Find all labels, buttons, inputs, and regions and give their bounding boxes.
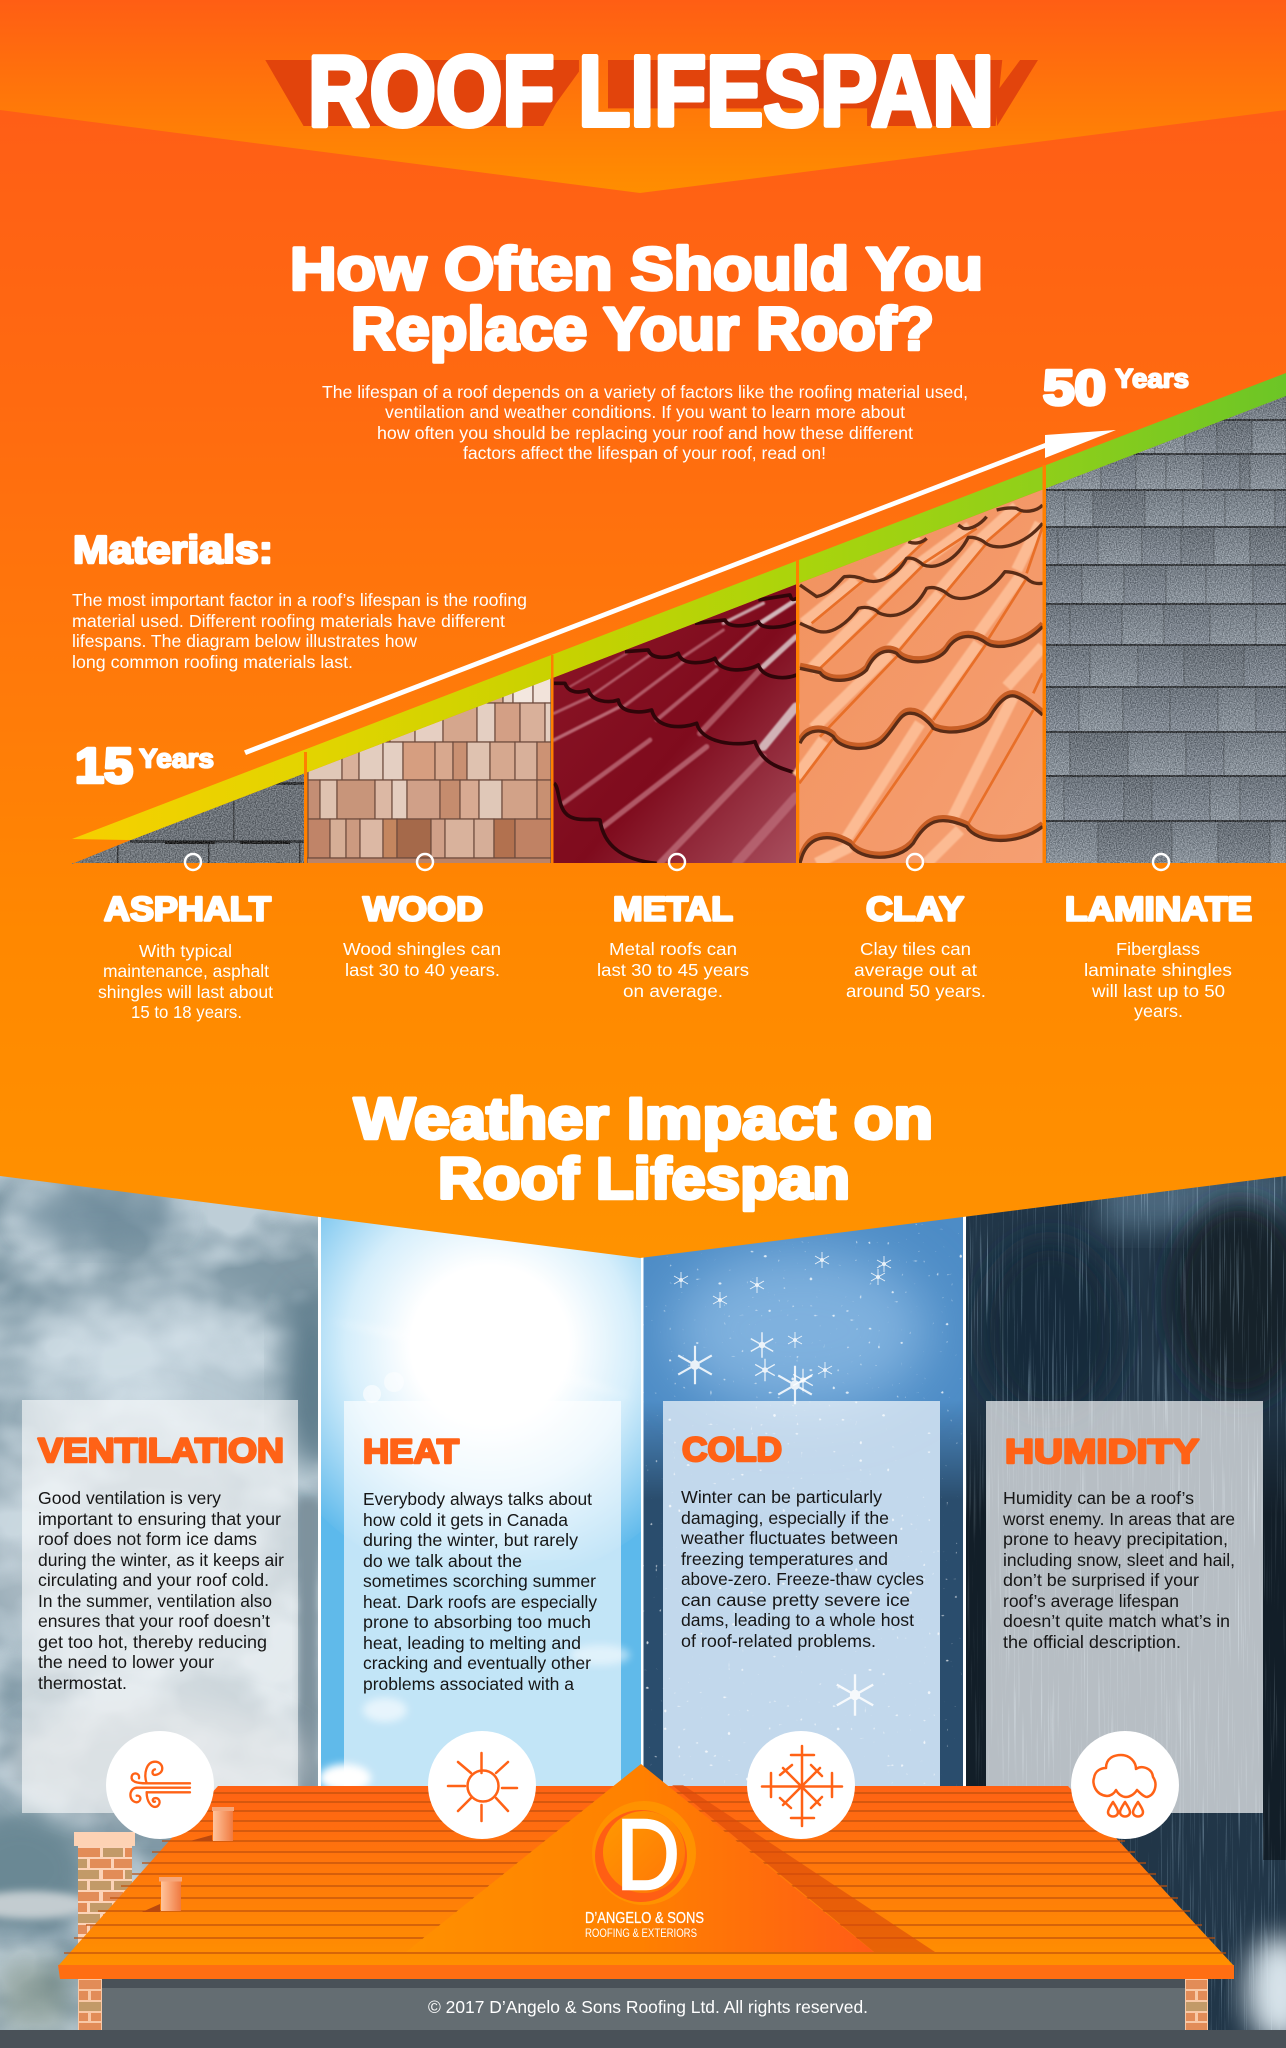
gable with logo bbox=[406, 1764, 874, 1952]
card: cold: Winter can be particularly bbox=[681, 1487, 882, 1507]
card: humidity bbox=[986, 1401, 1263, 1813]
separators between materials bbox=[304, 465, 1046, 863]
intro paragraph bbox=[322, 382, 968, 463]
label: 15 years: 15 bbox=[75, 740, 133, 794]
card: heat bbox=[344, 1401, 621, 1813]
heading: weather impact: Roof Lifespan bbox=[438, 1146, 850, 1212]
main orange section bbox=[0, 110, 1286, 1258]
card: ventilation: the need to lower your bbox=[38, 1652, 214, 1672]
roof vent pipe upper bbox=[190, 1807, 234, 1841]
chimney bbox=[74, 1832, 135, 1946]
logo mark bbox=[592, 1799, 696, 1911]
card: ventilation bbox=[22, 1400, 298, 1813]
heading: weather impact bbox=[354, 1086, 933, 1212]
material: laminate: years. bbox=[1134, 1001, 1183, 1021]
card: cold: freezing temperatures and bbox=[681, 1549, 888, 1569]
card: heat: heat. Dark roofs are especially bbox=[363, 1592, 597, 1612]
intro paragraph: factors affect the lifespan of your roof, read on! bbox=[463, 443, 826, 463]
card: cold: dams, leading to a whole host bbox=[681, 1610, 914, 1630]
logo wordmark bbox=[585, 1910, 704, 1940]
roof fascia bbox=[58, 1965, 1234, 1979]
card: heat: how cold it gets in Canada bbox=[363, 1510, 568, 1530]
card: humidity: don’t be surprised if your bbox=[1003, 1570, 1199, 1590]
roof bbox=[58, 1786, 1234, 1979]
card: ventilation: ensures that your roof doesn’t bbox=[38, 1611, 270, 1631]
material: wood: last 30 to 40 years. bbox=[345, 960, 500, 980]
card: heat: heat, leading to melting and bbox=[363, 1633, 581, 1653]
intro paragraph: how often you should be replacing your roof and how these different bbox=[377, 423, 913, 443]
icon: wind bbox=[106, 1731, 214, 1839]
wall soffit bbox=[102, 1979, 1185, 1988]
card: heat: cracking and eventually other bbox=[363, 1653, 591, 1673]
heading: materials: Materials: bbox=[73, 529, 273, 572]
photo: metal bbox=[553, 580, 797, 867]
material: laminate: laminate shingles bbox=[1084, 960, 1232, 980]
heading: how often: Replace Your Roof? bbox=[351, 296, 934, 362]
card: cold: above-zero. Freeze-thaw cycles bbox=[681, 1569, 924, 1589]
weather backgrounds bbox=[0, 1105, 1286, 2048]
arrow: 15 to 50 years bbox=[244, 430, 1116, 755]
timeline markers bbox=[185, 854, 1169, 870]
intro paragraph: The lifespan of a roof depends on a variety of factors like the roofing material used, bbox=[322, 382, 968, 402]
intro paragraph: ventilation and weather conditions. If you want to learn more about bbox=[385, 402, 905, 422]
card: ventilation: get too hot, thereby reducing bbox=[38, 1632, 267, 1652]
heading: weather impact: Weather Impact on bbox=[354, 1086, 933, 1152]
icon: sun bbox=[428, 1731, 536, 1839]
material: metal: METAL bbox=[613, 890, 733, 928]
card: ventilation: during the winter, as it keeps air bbox=[38, 1550, 284, 1570]
material: asphalt: maintenance, asphalt bbox=[103, 961, 269, 981]
materials paragraph: lifespans. The diagram below illustrates how bbox=[72, 631, 417, 651]
material: metal: on average. bbox=[623, 981, 723, 1001]
card: heat: do we talk about the bbox=[363, 1551, 522, 1571]
logo wordmark: D’ANGELO & SONS bbox=[585, 1910, 704, 1927]
texture grain bbox=[72, 774, 304, 864]
card: cold: of roof-related problems. bbox=[681, 1631, 876, 1651]
wall bbox=[102, 1979, 1185, 2030]
card: humidity: HUMIDITY bbox=[1005, 1433, 1199, 1471]
logo mark: D bbox=[616, 1799, 680, 1911]
card: cold bbox=[663, 1401, 940, 1813]
card: humidity: including snow, sleet and hail, bbox=[1003, 1550, 1235, 1570]
label: 15 years bbox=[75, 740, 214, 794]
card: heat: Everybody always talks about bbox=[363, 1489, 592, 1509]
icon: rain cloud bbox=[1071, 1731, 1179, 1839]
card: humidity: the official description. bbox=[1003, 1632, 1181, 1652]
material: asphalt bbox=[98, 890, 273, 1022]
material: wood bbox=[343, 890, 501, 980]
material: laminate bbox=[1065, 890, 1252, 1021]
card: ventilation: thermostat. bbox=[38, 1673, 127, 1693]
card: ventilation: circulating and your roof cold. bbox=[38, 1570, 269, 1590]
materials paragraph: material used. Different roofing materials have different bbox=[72, 611, 505, 631]
card: humidity: Humidity can be a roof’s bbox=[1003, 1488, 1194, 1508]
photo: laminate bbox=[1046, 380, 1286, 864]
label: 50 years bbox=[1043, 362, 1189, 416]
panel background: snow bbox=[644, 1217, 963, 1786]
ground strip bbox=[0, 2030, 1286, 2048]
material: laminate: will last up to 50 bbox=[1091, 981, 1225, 1001]
card: heat: problems associated with a bbox=[363, 1674, 574, 1694]
material: asphalt: With typical bbox=[139, 941, 232, 961]
column dividers bbox=[318, 1150, 966, 1790]
materials paragraph bbox=[72, 590, 527, 672]
material: metal bbox=[597, 890, 749, 1001]
card: cold: can cause pretty severe ice bbox=[681, 1590, 910, 1610]
card: heat: sometimes scorching summer bbox=[363, 1571, 596, 1591]
photo: asphalt bbox=[72, 774, 304, 864]
card: ventilation: Good ventilation is very bbox=[38, 1488, 221, 1508]
material: clay: around 50 years. bbox=[846, 981, 986, 1001]
panel background: rain bbox=[966, 1150, 1286, 2048]
material: laminate: LAMINATE bbox=[1065, 890, 1252, 928]
photo: wood bbox=[307, 660, 551, 864]
ascending colour band bbox=[72, 373, 1286, 840]
material: asphalt: shingles will last about bbox=[98, 982, 273, 1002]
card: ventilation: roof does not form ice dams bbox=[38, 1529, 257, 1549]
card: heat: HEAT bbox=[363, 1433, 459, 1471]
panel background: clouds bbox=[0, 1176, 318, 2030]
copyright: © 2017 D’Angelo & Sons Roofing Ltd. All rights reserved. bbox=[428, 1997, 868, 2017]
gable shadow bbox=[672, 1785, 935, 1952]
heading: how often bbox=[290, 236, 983, 362]
material: laminate: Fiberglass bbox=[1116, 939, 1200, 959]
card: ventilation: VENTILATION bbox=[38, 1432, 284, 1470]
material: clay bbox=[846, 890, 986, 1001]
material: asphalt: 15 to 18 years. bbox=[131, 1002, 242, 1022]
heading: how often: How Often Should You bbox=[290, 236, 983, 302]
roof vent pipe lower bbox=[142, 1877, 182, 1912]
card: cold: COLD bbox=[682, 1431, 782, 1469]
material: wood: WOOD bbox=[363, 890, 483, 928]
brick columns bbox=[78, 1979, 1208, 2030]
card: cold: weather fluctuates between bbox=[680, 1528, 898, 1548]
material: clay: Clay tiles can bbox=[860, 939, 971, 959]
icon: snowflake bbox=[747, 1731, 855, 1839]
material: wood: Wood shingles can bbox=[343, 939, 501, 959]
card: ventilation: important to ensuring that your bbox=[38, 1509, 281, 1529]
materials paragraph: long common roofing materials last. bbox=[72, 652, 353, 672]
card: ventilation: In the summer, ventilation also bbox=[38, 1591, 272, 1611]
photo: clay bbox=[797, 487, 1043, 867]
material: clay: CLAY bbox=[866, 890, 964, 928]
title: ROOF LIFESPAN bbox=[308, 36, 994, 148]
header background bbox=[0, 0, 1286, 200]
logo wordmark: ROOFING & EXTERIORS bbox=[585, 1928, 697, 1940]
material: metal: Metal roofs can bbox=[609, 939, 737, 959]
card: humidity: worst enemy. In areas that are bbox=[1002, 1509, 1235, 1529]
title shadow bbox=[265, 60, 1038, 126]
materials paragraph: The most important factor in a roof’s lifespan is the roofing bbox=[72, 590, 527, 610]
material: metal: last 30 to 45 years bbox=[597, 960, 749, 980]
label: 50 years: Years bbox=[1115, 364, 1189, 394]
card: cold: damaging, especially if the bbox=[681, 1508, 889, 1528]
material: asphalt: ASPHALT bbox=[104, 890, 271, 928]
label: 50 years: 50 bbox=[1043, 362, 1106, 416]
card: heat: during the winter, but rarely bbox=[363, 1530, 578, 1550]
material photos diagram bbox=[72, 380, 1286, 867]
card: humidity: roof’s average lifespan bbox=[1003, 1591, 1179, 1611]
label: 15 years: Years bbox=[139, 744, 214, 774]
card: humidity: doesn’t quite match what’s in bbox=[1003, 1611, 1230, 1631]
material: clay: average out at bbox=[854, 960, 977, 980]
card: heat: prone to absorbing too much bbox=[363, 1612, 591, 1632]
card: humidity: prone to heavy precipitation, bbox=[1003, 1529, 1228, 1549]
panel background: sun bbox=[321, 1217, 641, 1786]
